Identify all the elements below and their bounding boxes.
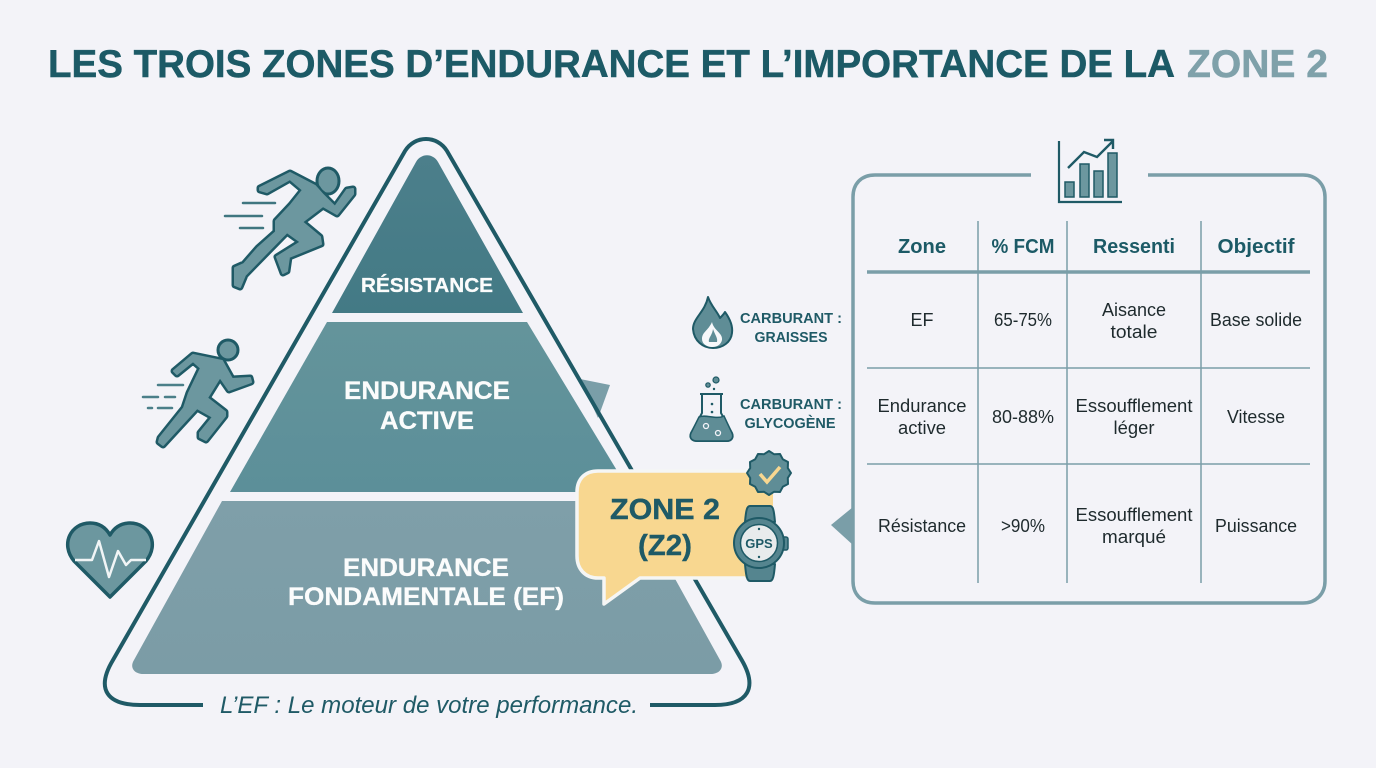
caption: L’EF : Le moteur de votre performance. bbox=[220, 692, 638, 719]
icon: GPS watch bbox=[734, 506, 788, 581]
title: LES TROIS ZONES D’ENDURANCE ET L’IMPORTANCE DE LA bbox=[48, 43, 1175, 86]
table row: EF bbox=[910, 300, 1302, 342]
table row: endurance active: Endurance bbox=[878, 396, 966, 416]
table header: Ressenti bbox=[1093, 236, 1175, 258]
callout: zone 2: (Z2) bbox=[638, 530, 692, 562]
table grid bbox=[867, 221, 1310, 583]
tier: endurance active: ACTIVE bbox=[380, 407, 474, 435]
table row: endurance active: 80-88% bbox=[992, 407, 1054, 427]
pyramid bbox=[105, 139, 749, 705]
tier: résistance bbox=[332, 155, 523, 313]
label: carburant glycogène: CARBURANT : bbox=[740, 397, 842, 413]
callout: zone 2: ZONE 2 bbox=[610, 494, 720, 526]
panel: table bbox=[831, 140, 1325, 603]
table header: Objectif bbox=[1218, 236, 1295, 258]
table header bbox=[898, 236, 1295, 258]
icon: GPS watch: GPS bbox=[745, 536, 773, 551]
pyramid outline bbox=[105, 139, 749, 705]
small triangle behind pyramid bbox=[580, 379, 610, 418]
table row: endurance active bbox=[878, 396, 1285, 438]
icon: flame bbox=[693, 297, 732, 348]
table header: % FCM bbox=[992, 236, 1054, 258]
icon: heart bbox=[68, 523, 152, 597]
tier: endurance fondamentale: FONDAMENTALE (EF) bbox=[288, 583, 564, 611]
table row: résistance: Essoufflement bbox=[1076, 505, 1192, 525]
label: carburant graisses: CARBURANT : bbox=[740, 311, 842, 327]
panel border bbox=[853, 175, 1325, 603]
tier: endurance fondamentale: ENDURANCE bbox=[343, 554, 509, 582]
tier: résistance: RÉSISTANCE bbox=[361, 274, 493, 297]
table header: Zone bbox=[898, 236, 946, 258]
callout: zone 2 bbox=[577, 471, 773, 604]
table row: EF: 65-75% bbox=[994, 310, 1052, 330]
panel pointer bbox=[831, 507, 853, 545]
icon: check badge bbox=[747, 451, 791, 495]
label: carburant graisses: GRAISSES bbox=[754, 330, 828, 346]
icon: runner bbox=[143, 340, 251, 445]
table row: EF: totale bbox=[1110, 322, 1158, 342]
icon: flask bbox=[690, 377, 733, 441]
table row: EF: Base solide bbox=[1210, 310, 1302, 330]
icon: sprinter bbox=[225, 168, 353, 287]
title: ZONE 2 bbox=[1187, 43, 1328, 86]
icon: chart bbox=[1059, 140, 1122, 202]
label: carburant graisses bbox=[740, 311, 842, 346]
tier: endurance fondamentale bbox=[132, 501, 722, 674]
table row: résistance: Résistance bbox=[878, 516, 966, 536]
table row: EF: Aisance bbox=[1102, 300, 1166, 320]
table row: EF: EF bbox=[910, 310, 934, 330]
table row: endurance active: léger bbox=[1114, 418, 1154, 438]
table row: résistance bbox=[878, 505, 1297, 547]
table row: résistance: marqué bbox=[1102, 527, 1166, 547]
table row: résistance: >90% bbox=[1001, 516, 1045, 536]
table row: endurance active: active bbox=[898, 418, 946, 438]
table row: endurance active: Vitesse bbox=[1227, 407, 1285, 427]
tier: endurance active bbox=[230, 322, 630, 492]
tier: endurance active: ENDURANCE bbox=[344, 377, 510, 405]
table row: endurance active: Essoufflement bbox=[1076, 396, 1192, 416]
table row: résistance: Puissance bbox=[1215, 516, 1297, 536]
label: carburant glycogène: GLYCOGÈNE bbox=[744, 415, 836, 432]
label: carburant glycogène bbox=[740, 397, 842, 432]
